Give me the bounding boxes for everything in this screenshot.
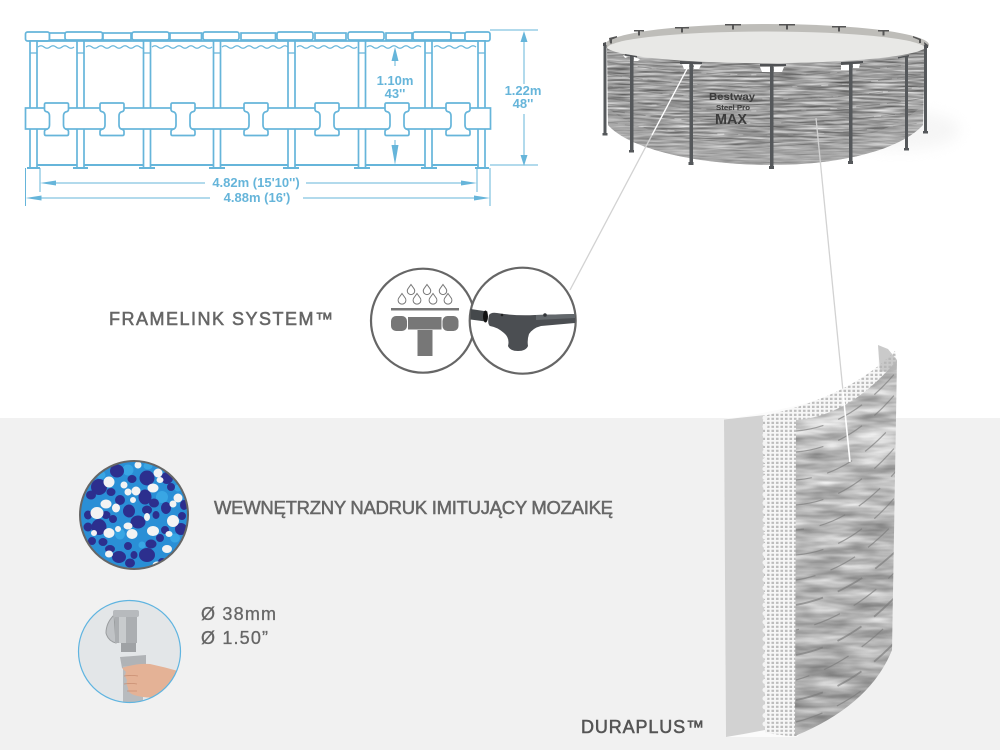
dimension labels	[212, 73, 541, 205]
dimension labels: 4.82m (15'10'')	[212, 175, 300, 190]
dimension labels: 1.10m	[377, 73, 413, 88]
mesh core	[760, 345, 900, 740]
pool wall with stone print	[607, 48, 924, 165]
mosaic print label: WEWNĘTRZNY NADRUK IMITUJĄCY MOZAIKĘ	[214, 497, 613, 518]
skimmer hose size labels: Ø 38mm	[201, 604, 276, 624]
pole feet	[27, 167, 489, 169]
dimension labels: 43''	[385, 86, 405, 101]
duraplus label: DURAPLUS™	[581, 717, 704, 737]
callout line end over stone layer	[843, 392, 850, 462]
front brackets	[603, 42, 928, 72]
T connector	[488, 313, 576, 351]
rail over connector	[391, 308, 459, 310]
dimension diagram of the pool	[26, 30, 541, 206]
callout line to framelink	[570, 67, 688, 290]
pool wall bottom line	[34, 164, 482, 166]
top rail	[26, 32, 490, 41]
stone printed outer layer	[790, 355, 900, 740]
loose tube	[470, 309, 488, 322]
dark blue stones	[84, 466, 187, 566]
light blue stones	[97, 463, 181, 548]
Bestway logo: MAX	[715, 112, 747, 128]
lower grey background panel	[0, 418, 1000, 750]
skimmer hose size labels: Ø 1.50”	[201, 628, 268, 648]
pool floor seen from above	[607, 32, 925, 66]
hand	[122, 664, 178, 698]
dimension labels: 4.88m (16')	[224, 190, 290, 205]
Bestway logo: Steel Pro	[716, 105, 750, 112]
vertical poles	[30, 41, 485, 168]
hose connector photo	[78, 600, 180, 706]
Bestway logo	[709, 91, 755, 128]
stone courses	[607, 62, 925, 135]
white stones	[91, 462, 182, 568]
front frame poles	[604, 45, 927, 169]
framelink label: FRAMELINK SYSTEM™	[109, 309, 333, 329]
printed stone joints	[796, 371, 897, 722]
skimmer hose size labels	[201, 604, 276, 648]
icon: framelink connector photo	[470, 268, 576, 374]
mosaic swatch	[80, 461, 188, 569]
wall bracket	[106, 615, 116, 643]
duraplus wall layers	[724, 345, 900, 740]
mid belt	[26, 108, 490, 129]
pole feet	[602, 131, 928, 169]
pool photo	[600, 24, 960, 170]
callout line to wall material, pool part	[816, 118, 850, 462]
dimension labels: 1.22m	[505, 83, 541, 98]
back white sheet	[724, 345, 897, 737]
ground shadow	[840, 110, 960, 150]
water line	[38, 46, 476, 48]
belt connectors	[44, 103, 470, 136]
Bestway logo: Bestway	[709, 91, 755, 103]
lower pipe	[120, 655, 146, 668]
dimension labels: 48''	[513, 96, 533, 111]
top edge of sheet	[878, 345, 897, 372]
grey inner layer	[724, 415, 765, 737]
dimension lines and arrows	[26, 30, 538, 206]
rain drops	[398, 284, 452, 304]
upper fitting	[113, 610, 139, 617]
back frame brackets	[609, 24, 921, 44]
top rim	[605, 24, 929, 66]
icon: framelink rain diagram	[371, 269, 475, 373]
